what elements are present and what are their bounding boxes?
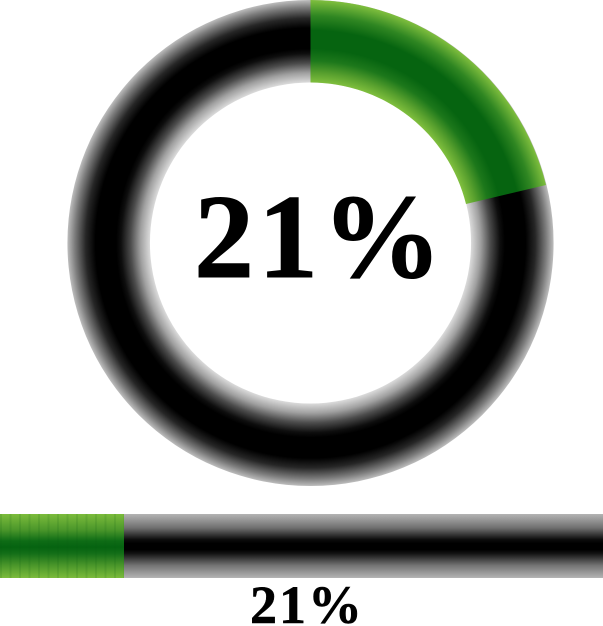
donut green 21 percent segment [310, 0, 546, 204]
donut value label: 21% [194, 170, 446, 303]
donut remaining track [67, 0, 554, 486]
donut chart [67, 0, 554, 486]
bar green stripes [0, 514, 124, 578]
bar remaining track [124, 514, 603, 578]
progress bar [0, 514, 603, 578]
bar green 21 percent fill [0, 514, 124, 578]
